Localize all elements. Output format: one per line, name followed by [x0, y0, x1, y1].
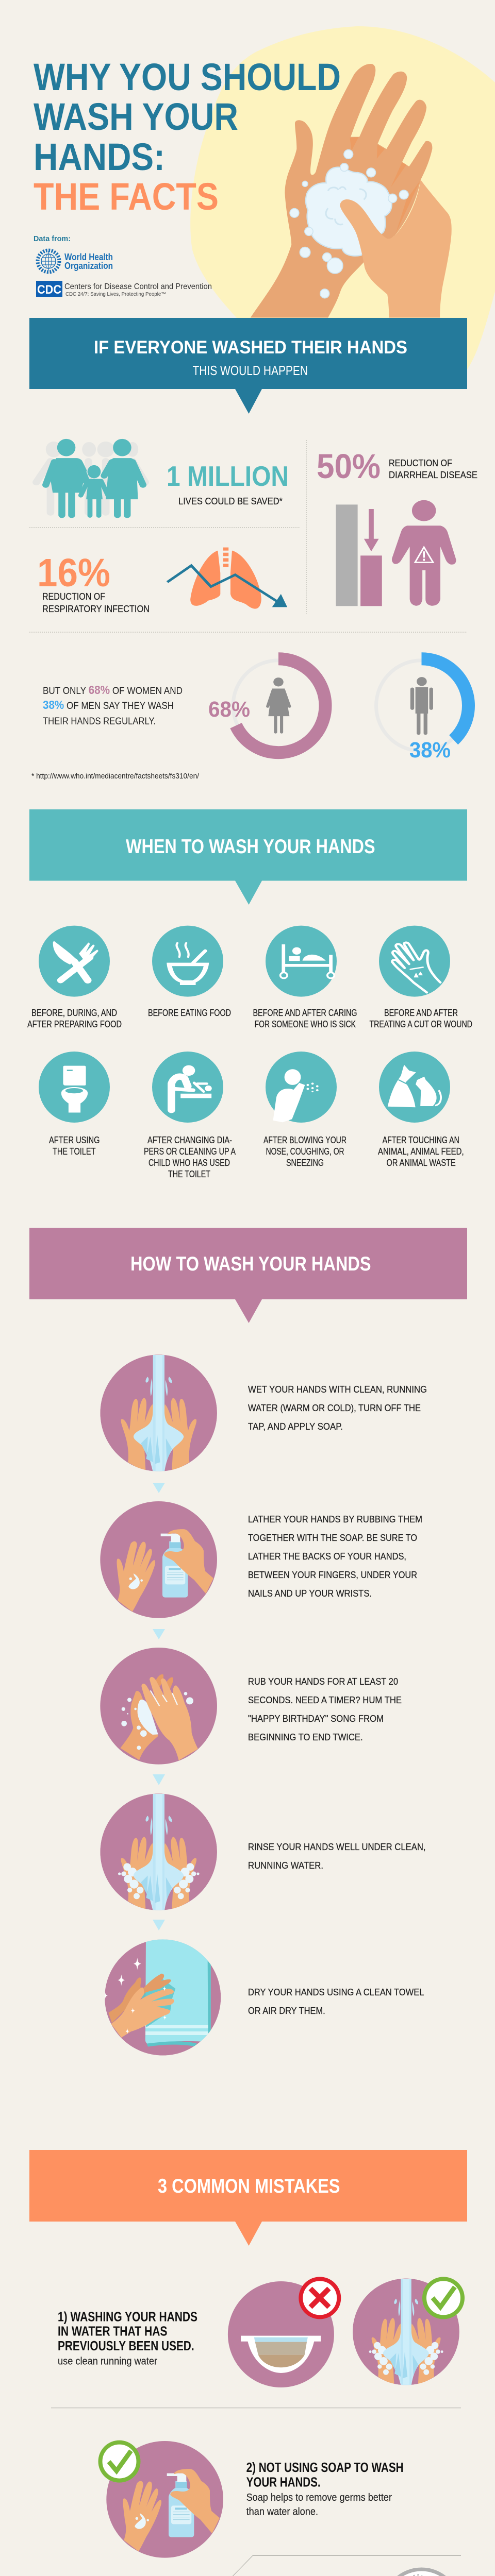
badge: wrong [301, 2279, 339, 2317]
banner: if everyone washed [29, 318, 467, 414]
mistake 1 text: use clean running water [58, 2355, 157, 2367]
icon: sick bed [266, 926, 337, 997]
banner: if everyone washed: IF EVERYONE WASHED THEIR HANDS [94, 337, 407, 358]
badge: right [100, 2443, 138, 2481]
label: caring for sick: BEFORE AND AFTER CARING [253, 1007, 357, 1018]
mistake 2 text [246, 2461, 404, 2518]
icon: toilet [39, 1052, 110, 1123]
arrow: step 2 to 3 [153, 1629, 165, 1639]
text: but only 68% [43, 683, 183, 727]
label: changing diapers: THE TOILET [168, 1168, 210, 1179]
icon: lungs with falling line [167, 548, 287, 609]
logo: World Health Organization: World Health [64, 252, 113, 262]
chart: women donut 68%: 68% [208, 697, 250, 722]
chart: men donut 38%: 38% [409, 738, 451, 762]
title: WHY YOU SHOULD [34, 56, 341, 98]
step 3 text: "HAPPY BIRTHDAY" SONG FROM [248, 1713, 384, 1724]
step 2 text: NAILS AND UP YOUR WRISTS. [248, 1588, 372, 1599]
label: touching animal: AFTER TOUCHING AN [383, 1134, 459, 1145]
label: touching animal: ANIMAL, ANIMAL FEED, [378, 1146, 464, 1157]
step 1 text: WET YOUR HANDS WITH CLEAN, RUNNING [248, 1384, 427, 1395]
step 2 text: LATHER THE BACKS OF YOUR HANDS, [248, 1551, 406, 1562]
step 5 text: OR AIR DRY THEM. [248, 2005, 325, 2016]
banner: how to wash [29, 1228, 467, 1323]
step 4 text: RINSE YOUR HANDS WELL UNDER CLEAN, [248, 1841, 426, 1852]
mistake 1 illustration: running water [353, 2278, 459, 2386]
label: changing diapers [144, 1134, 236, 1179]
title: HANDS: [34, 135, 165, 178]
icon: person sneezing [266, 1052, 337, 1123]
stat: 50% diarrheal disease: REDUCTION OF [389, 457, 452, 468]
label: caring for sick: FOR SOMEONE WHO IS SICK [255, 1019, 356, 1029]
step 1 text: TAP, AND APPLY SOAP. [248, 1421, 343, 1432]
icon: bars, arrow and person with warning [336, 500, 456, 606]
arrow: step 4 to 5 [153, 1920, 165, 1930]
icon: changing diapers [152, 1052, 223, 1123]
stat: 50% diarrheal disease [317, 447, 477, 486]
badge: right [424, 2279, 463, 2317]
step 1 illustration: wet hands [100, 1354, 217, 1472]
banner: how to wash: HOW TO WASH YOUR HANDS [130, 1253, 371, 1275]
label: cut or wound [369, 1007, 472, 1029]
icon: knife and fork [39, 926, 110, 997]
step 1 text [248, 1384, 427, 1432]
title: WASH YOUR [34, 95, 238, 138]
stat: 1 million lives [167, 460, 289, 506]
label: changing diapers: CHILD WHO HAS USED [148, 1157, 230, 1168]
stat: 16% respiratory infection: REDUCTION OF [42, 591, 105, 602]
logo: CDC: Centers for Disease Control and Prevention [64, 282, 212, 291]
hero illustration: hands with foam [251, 64, 452, 317]
step 3 text [248, 1676, 402, 1742]
data sources [34, 235, 212, 297]
logo: World Health Organization [38, 250, 113, 272]
title [34, 56, 341, 218]
label: blowing nose: SNEEZING [286, 1157, 324, 1168]
logo: World Health Organization: Organization [64, 261, 113, 271]
text: but only 68%: 38% OF MEN SAY THEY WASH [43, 698, 174, 711]
icon: dog and cat [379, 1052, 450, 1123]
text: but only 68%: BUT ONLY 68% OF WOMEN AND [43, 683, 183, 697]
text: but only 68%: THEIR HANDS REGULARLY. [43, 716, 156, 727]
stat: 16% respiratory infection: RESPIRATORY INFECTION [42, 603, 150, 614]
mistake 2 text: than water alone. [246, 2506, 318, 2518]
label: eating food: BEFORE EATING FOOD [148, 1007, 231, 1018]
mistake 2 text: Soap helps to remove germs better [246, 2492, 392, 2503]
step 2 illustration: soap [100, 1501, 217, 1618]
logo: CDC [36, 281, 212, 297]
mistake 1 text: PREVIOUSLY BEEN USED. [58, 2339, 194, 2353]
label: blowing nose [263, 1134, 346, 1168]
mistake 1 illustration: dirty basin [228, 2281, 334, 2387]
banner: when to wash: WHEN TO WASH YOUR HANDS [126, 836, 375, 858]
step 4 text: RUNNING WATER. [248, 1860, 323, 1871]
title: THE FACTS [34, 175, 219, 218]
stat: 1 million lives: 1 MILLION [167, 460, 289, 492]
mistake 1 text [58, 2310, 197, 2367]
step 3 text: SECONDS. NEED A TIMER? HUM THE [248, 1694, 402, 1705]
label: caring for sick [253, 1007, 357, 1029]
footnote: * http://www.who.int/mediacentre/factsheets/fs310/en/ [31, 772, 200, 781]
label: touching animal: OR ANIMAL WASTE [387, 1157, 456, 1168]
step 3 text: BEGINNING TO END TWICE. [248, 1732, 363, 1742]
stat: 50% diarrheal disease: 50% [317, 447, 381, 486]
stat: 1 million lives: LIVES COULD BE SAVED* [178, 496, 283, 506]
label: using the toilet [49, 1134, 100, 1157]
stat: 16% respiratory infection [37, 551, 150, 614]
label: changing diapers: PERS OR CLEANING UP A [144, 1146, 236, 1157]
stat: 16% respiratory infection: 16% [37, 551, 110, 595]
banner: if everyone washed: THIS WOULD HAPPEN [193, 363, 308, 378]
icon: family [36, 439, 145, 516]
step 5 text: DRY YOUR HANDS USING A CLEAN TOWEL [248, 1987, 424, 1997]
stat: 50% diarrheal disease: DIARRHEAL DISEASE [389, 469, 477, 480]
label: preparing food [27, 1007, 122, 1029]
data sources: Data from: [34, 235, 71, 243]
logo: CDC: CDC 24/7: Saving Lives, Protecting People™ [65, 292, 166, 297]
label: changing diapers: AFTER CHANGING DIA- [147, 1134, 232, 1145]
arrow: step 1 to 2 [153, 1483, 165, 1493]
step 1 text: WATER (WARM OR COLD), TURN OFF THE [248, 1402, 421, 1413]
icon: bowl [152, 926, 223, 997]
label: touching animal [378, 1134, 464, 1168]
mistake 1 text: 1) WASHING YOUR HANDS [58, 2310, 197, 2325]
step 4 text [248, 1841, 426, 1871]
label: blowing nose: NOSE, COUGHING, OR [266, 1146, 344, 1157]
label: using the toilet: THE TOILET [53, 1146, 96, 1157]
background yellow circle [190, 26, 495, 369]
icon: hand with cut [379, 926, 450, 997]
label: using the toilet: AFTER USING [49, 1134, 100, 1145]
step 3 illustration: rubbing [100, 1648, 217, 1765]
arrow: step 3 to 4 [153, 1774, 165, 1785]
label: preparing food: BEFORE, DURING, AND [31, 1007, 117, 1018]
mistake 2 illustration: soap [106, 2441, 223, 2558]
step 2 text: BETWEEN YOUR FINGERS, UNDER YOUR [248, 1569, 417, 1580]
chart: women donut 68% [208, 659, 325, 753]
banner: common mistakes [29, 2150, 467, 2246]
step 2 text: LATHER YOUR HANDS BY RUBBING THEM [248, 1514, 422, 1524]
logo: CDC: CDC [37, 283, 61, 297]
mistake 2 text: 2) NOT USING SOAP TO WASH [246, 2461, 404, 2475]
callout: germs on fingers [335, 2569, 459, 2576]
step 2 text: TOGETHER WITH THE SOAP. BE SURE TO [248, 1532, 417, 1543]
step 4 illustration: rinse [100, 1793, 217, 1911]
banner: when to wash [29, 809, 467, 905]
step 5 illustration: towel [103, 1937, 221, 2056]
banner: common mistakes: 3 COMMON MISTAKES [158, 2175, 340, 2197]
step 3 text: RUB YOUR HANDS FOR AT LEAST 20 [248, 1676, 398, 1687]
step 5 text [248, 1987, 424, 2016]
mistake 2 text: YOUR HANDS. [246, 2475, 321, 2489]
label: blowing nose: AFTER BLOWING YOUR [263, 1134, 346, 1145]
mistake 1 text: IN WATER THAT HAS [58, 2325, 167, 2339]
step 2 text [248, 1514, 422, 1599]
label: cut or wound: BEFORE AND AFTER [384, 1007, 458, 1018]
label: preparing food: AFTER PREPARING FOOD [27, 1019, 122, 1029]
chart: men donut 38% [374, 659, 468, 762]
